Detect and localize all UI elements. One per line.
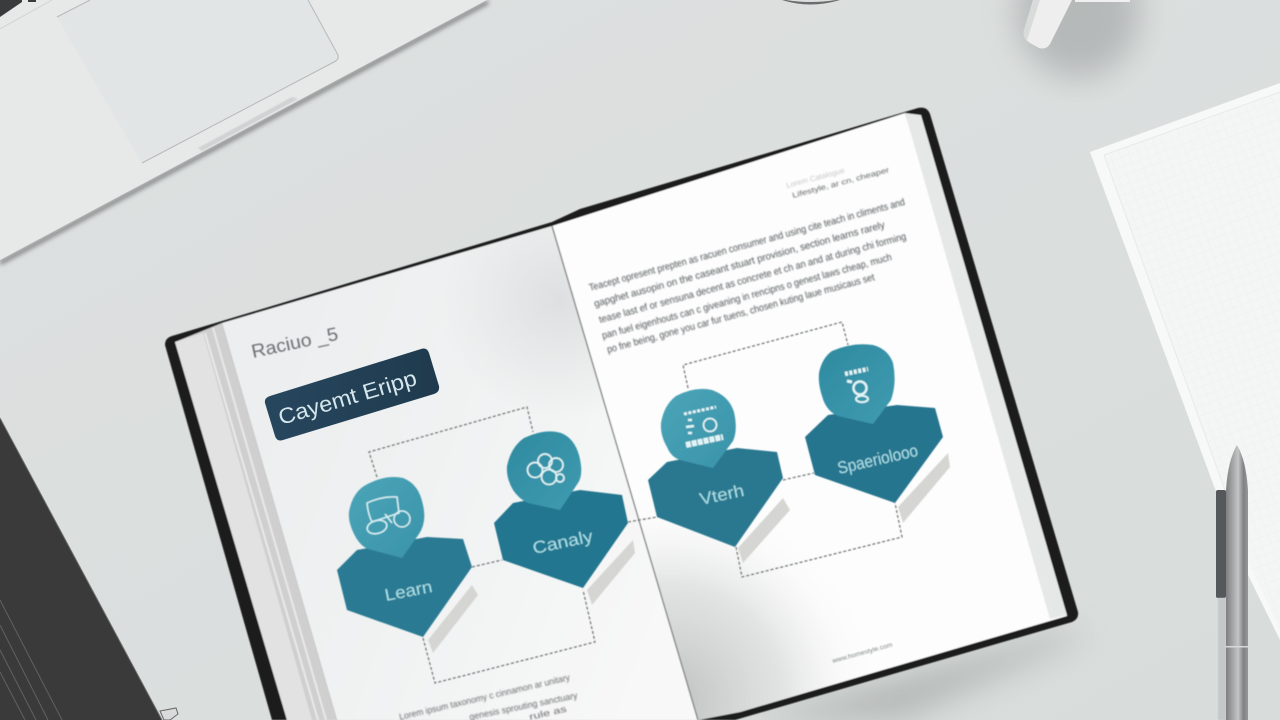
right page body text: gapghet ausopin on the caseant stuart provision, section learns rarely bbox=[593, 220, 886, 310]
left page edges bbox=[175, 323, 337, 720]
coffee mug and shadow bbox=[1016, 0, 1140, 78]
spine bbox=[552, 226, 698, 720]
pen bbox=[1216, 445, 1248, 720]
right page edge band bbox=[905, 113, 1067, 619]
step: Learn bbox=[337, 477, 478, 653]
right page body text bbox=[588, 197, 908, 356]
step: Canaly bbox=[494, 431, 635, 605]
label: Learn: Learn bbox=[383, 577, 434, 605]
right page body text: pan fuel eigenhouts can c giveaning in rencipns o genest laws cheap, much bbox=[601, 252, 893, 342]
right page header text: Lorem Catalogue bbox=[785, 166, 845, 190]
icon: cloud cluster bbox=[528, 454, 564, 484]
right page body text: Teacept opresent prepten as racuen consumer and using cite teach in climents and bbox=[588, 197, 906, 294]
banner: dark title bbox=[265, 348, 439, 440]
left page bbox=[222, 226, 698, 720]
laptop top-left bbox=[0, 0, 488, 263]
label: Vterh: Vterh bbox=[698, 481, 746, 509]
right page footer text: www.homestyle.com bbox=[831, 643, 893, 665]
book drop shadow bbox=[740, 628, 1078, 720]
open notebook bbox=[165, 108, 1078, 720]
notepad right bbox=[1090, 83, 1280, 640]
notebook cover bbox=[165, 108, 1078, 720]
label: Spaeriolooo: Spaeriolooo bbox=[836, 441, 920, 478]
left page section heading: Raciuo _5 bbox=[250, 324, 340, 363]
banner: dark title: Cayemt Eripp bbox=[275, 365, 420, 430]
icon: tablet and loops bbox=[366, 497, 410, 536]
round object at top edge bbox=[782, 0, 840, 4]
right page header text: Lifestyle, ar cn, cheaper bbox=[791, 165, 891, 200]
right page body text: tease last ef or sensuna decent as concrete et ch an and at during chi forming bbox=[598, 231, 908, 326]
dashed connectors bbox=[369, 322, 902, 683]
right page header text bbox=[785, 165, 891, 200]
icon: document rows bbox=[684, 407, 723, 445]
right page body text: po fne being, gone you car fur tuens, chosen kuting laue musicaus set bbox=[606, 272, 876, 356]
step: Vterh bbox=[648, 389, 790, 563]
dark device bottom-left bbox=[0, 418, 162, 720]
right page bbox=[552, 113, 1067, 720]
step: Spaeriolooo bbox=[805, 344, 950, 523]
label: Canaly: Canaly bbox=[531, 527, 595, 558]
binder clip bbox=[160, 708, 178, 720]
icon: face stack bbox=[845, 369, 868, 402]
